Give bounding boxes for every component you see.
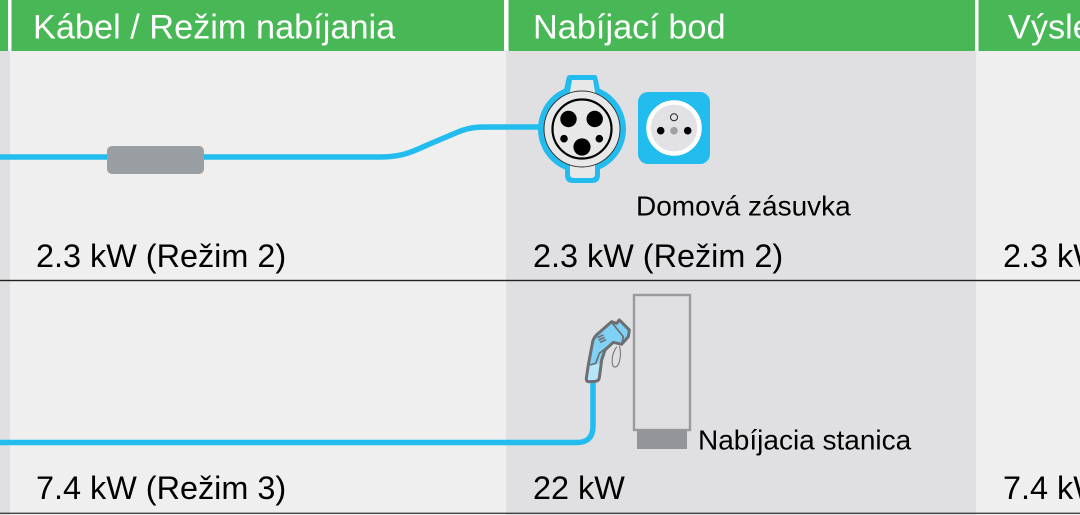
power: cable row 1: 2.3 kW (Režim 2) [36,238,286,274]
heading: charging point: Nabíjací bod [533,8,726,46]
heading: cable / mode: Kábel / Režim nabíjania [33,8,396,46]
cable with in-cable control box [0,127,542,174]
label: charging station: Nabíjacia stanica [698,424,912,456]
power: point row 1: 2.3 kW (Režim 2) [533,238,783,274]
panel: charging point column [506,51,976,515]
icon: household socket [638,92,710,164]
power: point row 2: 22 kW [533,470,625,506]
icon: type 2 connector [538,75,626,183]
power: cable row 2: 7.4 kW (Režim 3) [36,470,286,506]
cable row 2 [0,380,593,442]
icon: charging station [634,295,690,449]
icon: charging plug [586,320,629,382]
label: household socket: Domová zásuvka [636,190,851,222]
header bar [0,0,1080,51]
